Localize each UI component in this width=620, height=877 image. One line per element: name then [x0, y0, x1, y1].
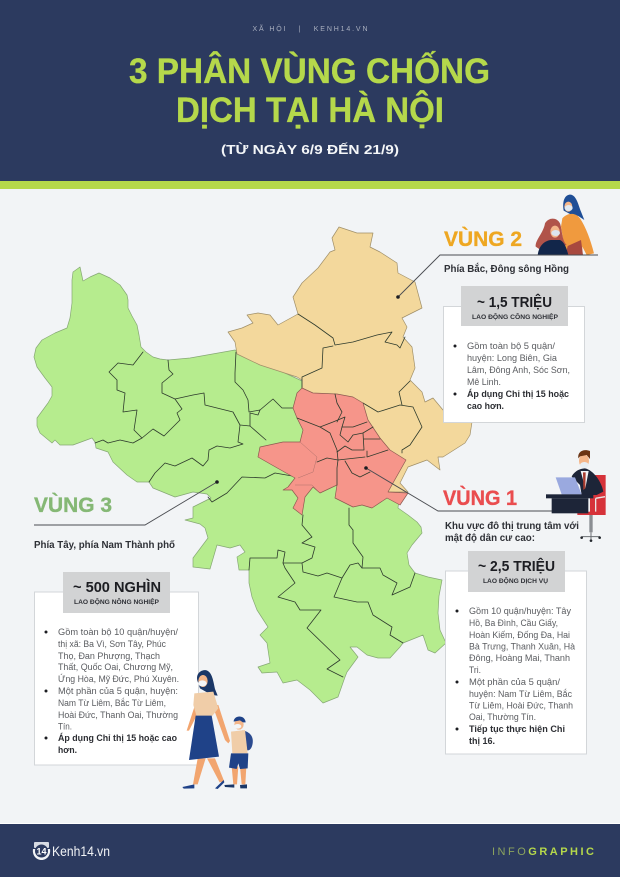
zone 3 list: Thọ, Đan Phượng, Thạch — [58, 651, 160, 662]
zone 2 list: huyện: Long Biên, Gia — [467, 353, 558, 364]
zone 1 list: Bà Trưng, Thanh Xuân, Hà — [469, 642, 576, 652]
zone 2 list: Lâm, Đông Anh, Sóc Sơn, — [467, 365, 570, 376]
zone 3 list: Hoài Đức, Thanh Oai, Thường — [58, 710, 178, 721]
icon: man working at desk — [546, 450, 606, 542]
footer band — [0, 823, 620, 877]
zone 1 list — [456, 606, 576, 747]
zone 3 list: Ứng Hòa, Mỹ Đức, Phú Xuyên. — [58, 674, 179, 685]
icon: Kenh14 logo: 14 — [36, 846, 47, 856]
zone 2 list — [454, 341, 570, 412]
zone 3 list: thị xã: Ba Vì, Sơn Tây, Phúc — [58, 639, 166, 650]
zone 3 list: Gồm toàn bộ 10 quận/huyện/ — [58, 627, 178, 638]
icon: Kenh14 logo — [33, 842, 50, 860]
zone 2 list: Gồm toàn bộ 5 quận/ — [467, 341, 555, 352]
section label: XÃ HỘI | KENH14.VN — [252, 24, 368, 33]
header band — [0, 0, 620, 189]
zone 2 stat: LAO ĐỘNG CÔNG NGHIỆP — [472, 312, 559, 321]
zone 3 list: Áp dụng Chỉ thị 15 hoặc cao — [58, 732, 177, 744]
zone 1 description: mật độ dân cư cao: — [445, 532, 535, 544]
title: DỊCH TẠI HÀ NỘI — [176, 90, 444, 130]
panel: zone 1 — [364, 450, 606, 754]
zone 1 description: Khu vực đô thị trung tâm với — [445, 520, 579, 532]
title — [129, 51, 490, 130]
zone 1 heading: VÙNG 1 — [443, 486, 517, 510]
icon: mother and child with masks — [182, 670, 253, 789]
zone 3 description: Phía Tây, phía Nam Thành phố — [34, 539, 176, 551]
zone 1 list: Oai, Thường Tín. — [469, 712, 536, 723]
zone 2 card — [444, 286, 584, 422]
zone 1 list: Hồ, Ba Đình, Cầu Giấy, — [469, 618, 558, 629]
zone 1 stat — [468, 551, 565, 592]
zone 3 card — [34, 572, 198, 765]
zone 3 list: Tín. — [58, 722, 72, 732]
zone 1 list: huyện: Nam Từ Liêm, Bắc — [469, 689, 572, 700]
title: 3 PHÂN VÙNG CHỐNG — [129, 51, 490, 91]
zone 1 list: Một phần của 5 quận/ — [469, 677, 560, 688]
zone 3 list: hơn. — [58, 745, 77, 756]
zone 3 region — [34, 267, 446, 703]
zone 1 list: Tiếp tục thực hiện Chỉ — [469, 724, 565, 735]
zone 2 stat: ~ 1,5 TRIỆU — [477, 293, 552, 311]
brand name: Kenh14.vn — [52, 843, 110, 859]
zone 1 list: Hoàn Kiếm, Đống Đa, Hai — [469, 630, 570, 641]
zone 2 description: Phía Bắc, Đông sông Hồng — [444, 262, 569, 275]
zone 2 list: Mê Linh. — [467, 377, 501, 388]
zone 1 list: Gồm 10 quận/huyện: Tây — [469, 606, 571, 617]
zone 2 region — [228, 227, 472, 492]
zone 3 heading: VÙNG 3 — [34, 493, 112, 517]
map of Hanoi — [34, 227, 472, 703]
zone 1 region — [258, 388, 408, 515]
zone 3 stat: LAO ĐỘNG NÔNG NGHIỆP — [74, 597, 160, 606]
zone 3 stat: ~ 500 NGHÌN — [73, 579, 161, 596]
zone 1 stat: LAO ĐỘNG DỊCH VỤ — [483, 576, 548, 585]
zone 3 leader line — [34, 480, 219, 525]
zone 3 list: Một phần của 5 quận, huyện: — [58, 686, 178, 697]
zone 1 description — [445, 520, 579, 544]
zone 1 stat: ~ 2,5 TRIỆU — [478, 557, 555, 575]
zone 1 leader line — [364, 466, 552, 511]
zone 3 stat — [63, 572, 170, 613]
zone 1 card — [446, 551, 586, 754]
panel: zone 3 — [34, 480, 253, 789]
zone 2 heading: VÙNG 2 — [444, 227, 522, 251]
zone 1 list: thị 16. — [469, 736, 495, 747]
zone 2 stat — [461, 286, 568, 326]
panel: zone 2 — [396, 195, 598, 422]
zone 1 list: Từ Liêm, Hoài Đức, Thanh — [469, 700, 573, 712]
zone 2 list: Áp dụng Chỉ thị 15 hoặc — [467, 388, 570, 400]
subtitle: (TỪ NGÀY 6/9 ĐẾN 21/9) — [221, 142, 399, 157]
zone 2 leader line — [396, 255, 598, 299]
zone 2 list: cao hơn. — [467, 401, 504, 412]
zone 1 list: Tri. — [469, 665, 481, 676]
zone 3 list: Nam Từ Liêm, Bắc Từ Liêm, — [58, 698, 166, 709]
zone 3 list: Thất, Quốc Oai, Chương Mỹ, — [58, 662, 173, 673]
infographic label: INFOGRAPHIC — [492, 846, 594, 858]
zone 3 list — [44, 627, 179, 756]
zone 1 list: Đông, Hoàng Mai, Thanh — [469, 653, 570, 664]
icon: two women with masks — [536, 195, 594, 255]
